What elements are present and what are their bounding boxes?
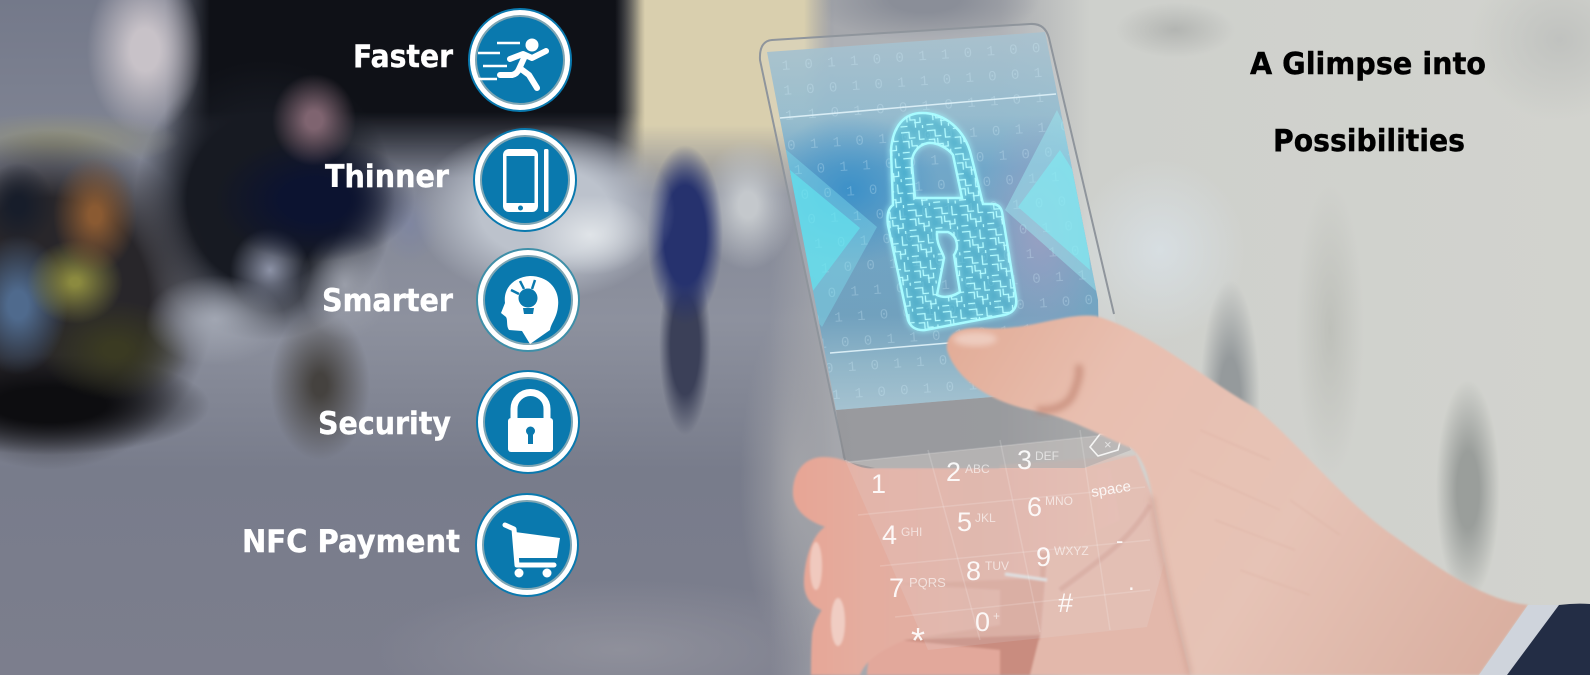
palm edge shadow — [1152, 497, 1190, 675]
palm crease — [1060, 505, 1150, 590]
palm under glass — [960, 455, 1191, 675]
screen with binary pattern: 0 1 0 1 1 0 0 1 1 0 1 0 0 1 1 0 — [758, 36, 1112, 77]
glowing circuit padlock — [888, 113, 1016, 330]
keypad keys: GHI — [901, 525, 922, 539]
keypad keys: JKL — [975, 511, 996, 525]
hand: thumb and back of hand over the glass — [947, 315, 1528, 675]
glass edge — [760, 24, 1114, 460]
keypad keys: 6 — [1027, 492, 1042, 522]
screen with binary pattern: 0 1 1 0 0 1 0 1 1 0 1 0 0 1 1 0 — [811, 288, 1165, 328]
background: tan building — [612, 0, 832, 195]
title: A Glimpse into — [1250, 47, 1486, 82]
icon: running figure — [469, 9, 571, 111]
lower grey glass panel — [836, 388, 1131, 468]
thumb crease shadow — [1040, 368, 1079, 410]
item: Smarter — [322, 249, 579, 351]
screen with binary pattern: 1 1 0 0 1 0 1 1 0 1 0 0 1 1 0 1 — [760, 61, 1114, 101]
background: dark storefront — [165, 0, 645, 180]
item: Faster — [353, 9, 571, 111]
label: Faster: Faster — [353, 39, 454, 75]
keypad keys: WXYZ — [1054, 544, 1089, 558]
fourth finger — [867, 640, 1000, 675]
hand wrinkles — [1190, 430, 1340, 595]
under-finger shading — [860, 520, 1050, 650]
thumb nail highlight — [953, 332, 997, 346]
screen with binary pattern: 1 1 0 1 0 0 1 0 1 1 0 1 0 1 0 0 — [791, 214, 1145, 255]
third finger — [811, 580, 1000, 675]
transparent phone — [758, 24, 1185, 661]
reflection — [1005, 574, 1047, 580]
keypad keys — [871, 434, 1135, 661]
keypad keys: # — [1058, 588, 1073, 618]
keypad keys: 2 — [946, 457, 961, 487]
keypad keys: * — [911, 620, 925, 661]
keypad keys: 0 — [975, 607, 990, 637]
keypad keys: . — [1128, 569, 1135, 596]
item: NFC Payment — [242, 494, 578, 596]
second finger — [804, 523, 1040, 614]
keypad grid — [848, 430, 1150, 640]
item: Thinner — [325, 129, 576, 231]
icon: head with light bulb — [477, 249, 579, 351]
screen with binary pattern: 0 1 1 0 1 0 0 1 0 1 1 0 1 0 1 0 — [762, 86, 1116, 126]
screen with binary pattern: 1 0 1 1 0 1 0 0 1 1 0 1 1 0 0 1 — [764, 116, 1118, 156]
screen with binary pattern: 0 1 0 1 1 0 1 1 0 0 1 0 1 1 0 1 — [825, 337, 1178, 378]
keypad keys: + — [993, 609, 1000, 623]
keypad keys: 7 — [889, 573, 904, 603]
keypad keys: space — [1090, 478, 1132, 501]
screen with binary pattern: 1 0 1 1 0 1 1 0 0 1 0 1 1 0 0 1 — [804, 263, 1158, 304]
fingers and palm behind the glass — [793, 455, 1191, 675]
title — [1250, 47, 1486, 159]
keypad keys: - — [1116, 528, 1123, 553]
keypad keys: DEF — [1035, 449, 1059, 463]
shadow between fingers and palm — [900, 635, 1040, 675]
screen with binary pattern: 1 0 0 1 1 0 1 0 1 1 0 1 0 1 0 1 — [818, 312, 1172, 353]
icon: phone front and side — [474, 129, 576, 231]
lighter keypad top row — [848, 432, 1136, 468]
keypad keys: 4 — [882, 520, 897, 550]
icon: padlock — [477, 371, 579, 473]
keypad keys: 5 — [957, 507, 972, 537]
keypad keys: ABC — [965, 462, 990, 476]
keypad keys: 1 — [871, 469, 886, 499]
keypad keys: TUV — [985, 559, 1009, 573]
finger nails — [810, 542, 822, 590]
label: Security: Security — [318, 406, 451, 442]
label: NFC Payment: NFC Payment — [242, 524, 460, 560]
screen with binary pattern: 1 1 0 0 1 0 1 0 1 1 0 1 0 0 1 0 — [831, 364, 1185, 404]
label: Smarter: Smarter — [322, 283, 454, 319]
keypad keys: 9 — [1036, 542, 1051, 572]
glass body — [760, 24, 1165, 650]
keypad keys: 8 — [966, 556, 981, 586]
left chevrons — [783, 147, 877, 327]
keypad keys: MNO — [1045, 494, 1073, 508]
item: Security — [318, 371, 579, 473]
screen with binary pattern: 0 1 0 1 1 0 0 1 1 0 1 0 0 1 1 0 — [771, 140, 1124, 181]
title: Possibilities — [1273, 124, 1465, 159]
right chevrons — [1005, 110, 1096, 290]
keypad keys: 3 — [1017, 445, 1032, 475]
screen with binary pattern: 1 0 0 1 0 1 1 0 1 0 0 1 1 0 1 0 — [778, 165, 1131, 206]
screen with binary pattern — [767, 32, 1098, 410]
screen with binary pattern: 0 1 0 0 1 1 0 1 0 0 1 1 0 1 1 0 — [798, 239, 1151, 279]
screen with binary pattern: 0 0 1 1 0 1 0 1 1 0 1 0 0 1 1 1 — [784, 189, 1138, 230]
first finger — [793, 457, 1120, 553]
icon: shopping cart — [476, 494, 578, 596]
keypad keys: × — [1104, 437, 1112, 452]
shirt cuff and jacket sleeve — [1479, 604, 1590, 675]
label: Thinner: Thinner — [325, 159, 450, 195]
keypad keys: PQRS — [909, 575, 946, 590]
